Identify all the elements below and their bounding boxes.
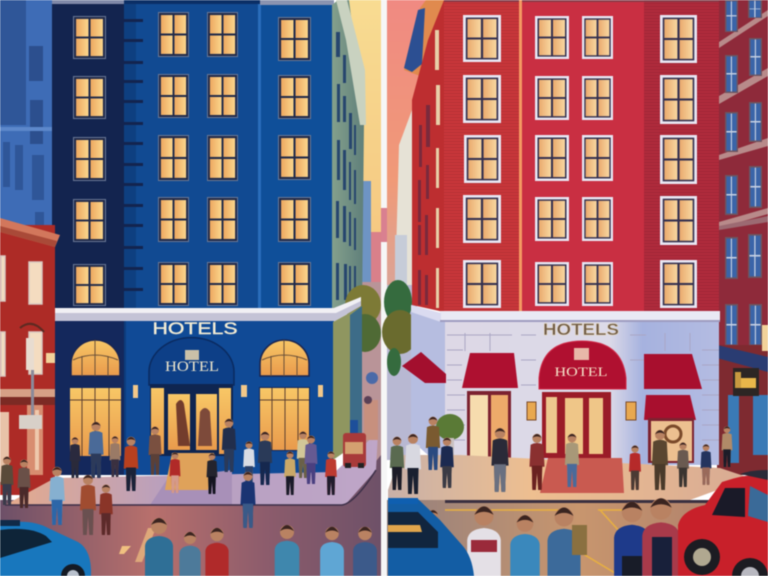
awning left	[462, 353, 518, 388]
entrance doors	[150, 384, 233, 456]
car: blue right	[388, 498, 474, 576]
storefront right	[717, 325, 768, 475]
arched awning with sign	[539, 341, 626, 389]
crowd: street left	[49, 467, 256, 535]
divider	[381, 0, 395, 576]
heading: HOTELS: HOTELS	[152, 319, 238, 338]
panel: left scene	[0, 0, 381, 576]
hotel ground floor	[55, 297, 362, 475]
far street backdrop right	[387, 285, 417, 460]
shop window right	[259, 387, 310, 451]
windows upper floors	[463, 15, 697, 308]
lamps	[527, 402, 636, 420]
panel: right scene	[382, 0, 768, 576]
crowd: pavement left	[0, 419, 337, 508]
car: blue left	[0, 520, 91, 576]
entrance doors	[542, 392, 611, 458]
stone blocks	[447, 333, 719, 440]
arched window left	[71, 340, 120, 376]
awning right	[644, 354, 702, 389]
distant building left	[361, 181, 381, 286]
sidewalk right	[388, 455, 750, 503]
tree right	[382, 280, 418, 376]
arched awning with sign: HOTEL	[554, 364, 608, 379]
shop window left	[69, 387, 122, 457]
neighbouring building right	[719, 0, 768, 350]
distant white building	[395, 110, 412, 292]
side windows	[435, 30, 440, 308]
side wall	[332, 0, 364, 310]
blue hotel building	[52, 0, 366, 310]
far crowd left	[350, 372, 378, 452]
street left	[0, 455, 381, 576]
crowd: foreground left	[145, 518, 377, 576]
fire-escape ticks	[124, 19, 143, 291]
windows upper floors	[73, 12, 311, 306]
cornice	[55, 297, 361, 321]
sky right	[387, 0, 447, 300]
tree left	[345, 285, 381, 352]
entrance arch with sign	[149, 338, 234, 385]
crowd: pavement right	[390, 417, 732, 494]
shop window left	[467, 391, 511, 461]
wall lamps	[133, 385, 323, 398]
tower top right	[404, 0, 444, 76]
background blue building	[0, 0, 53, 228]
planter	[436, 414, 464, 458]
entrance arch with sign: HOTEL	[165, 359, 219, 375]
red corner building	[0, 218, 60, 495]
van left	[343, 433, 366, 468]
car: red right	[678, 470, 768, 576]
street markings left	[119, 528, 156, 562]
heading: HOTELS: HOTELS	[543, 320, 619, 339]
lamp post and sign	[19, 324, 56, 429]
sidewalk left	[5, 432, 378, 505]
arched window right	[260, 340, 309, 376]
road markings right	[445, 510, 660, 576]
hanging sign	[733, 368, 759, 396]
cornice	[411, 305, 720, 322]
red hotel building	[412, 0, 720, 312]
far street backdrop left	[355, 282, 381, 462]
shop window right	[648, 418, 694, 463]
hotel ground floor right	[402, 305, 720, 470]
sky left	[340, 0, 381, 300]
awning lower right	[644, 395, 696, 420]
street right	[387, 500, 768, 576]
crowd: foreground right	[425, 498, 680, 576]
awning side	[402, 352, 446, 383]
